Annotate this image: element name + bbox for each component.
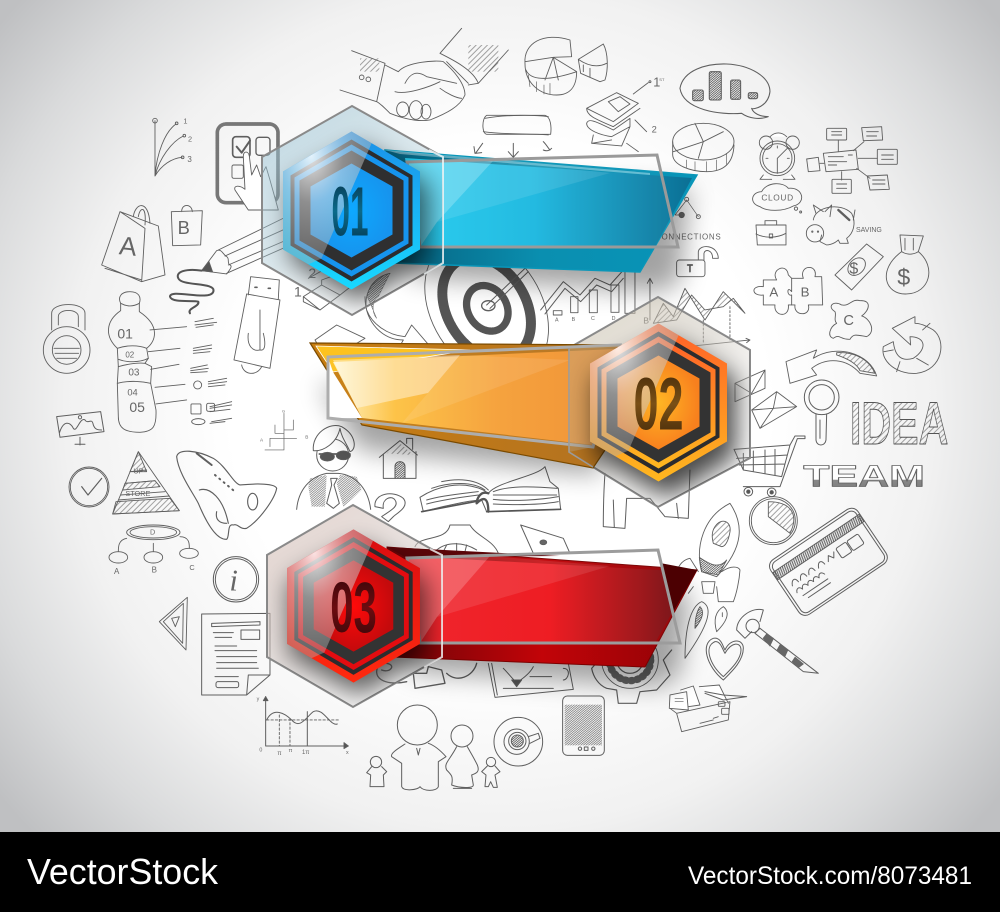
icon: store pyramid: UP — [133, 466, 144, 475]
banner face — [333, 349, 615, 445]
glass frame — [328, 345, 620, 447]
hex shadow — [289, 544, 426, 696]
hexagon badge 02 — [590, 324, 727, 482]
icon: numbered bottle chart — [108, 292, 232, 432]
glass hex edge over banner — [569, 348, 593, 467]
doodles: right column — [655, 123, 941, 383]
doodles: centre band — [294, 214, 750, 402]
icon: gear right — [592, 632, 672, 703]
hexagon badge 01 — [283, 132, 420, 290]
icon: briefcase — [756, 221, 786, 245]
icon: org diagram: B — [152, 566, 157, 575]
footer bar — [0, 832, 1000, 912]
icon: mountain axis chart: B — [643, 315, 649, 325]
icon: small tree diagram: A — [260, 438, 264, 443]
panel 03: red banner — [267, 505, 697, 707]
banner back — [310, 343, 620, 468]
icon: teardrops — [685, 602, 727, 658]
icon: document sheet — [202, 613, 270, 695]
icon: gear partial left — [377, 663, 477, 688]
icon: piggy bank: SAVING — [856, 227, 882, 234]
icon: family figures — [367, 705, 500, 790]
icon: house — [379, 438, 417, 478]
icon: small tree diagram: B — [305, 434, 308, 439]
icon: store pyramid: STORE — [125, 489, 151, 498]
hexagon badge 03 — [287, 529, 420, 682]
doodles: arrows under the button — [474, 142, 552, 157]
banner face — [405, 556, 695, 643]
icon: info circle — [213, 557, 259, 602]
icon: numbered bottle chart: 02 — [125, 350, 135, 359]
icon: question mark — [375, 494, 405, 522]
icon: numbered bottle chart: 03 — [128, 367, 140, 378]
icon: touch tablet with checkbox — [217, 124, 278, 210]
icon: three small arrows — [474, 142, 552, 157]
icon: check mark circle — [69, 467, 109, 507]
icon: rocket — [677, 503, 740, 602]
icon: recycle arrow — [883, 317, 941, 373]
icon: cube steps: 1 — [294, 284, 302, 300]
icon: puzzle A B: A — [769, 285, 778, 300]
icon: cube steps — [294, 265, 355, 310]
icon: org diagram — [109, 525, 198, 576]
icon: pie chart — [525, 37, 577, 95]
glass hexagon backing — [569, 297, 750, 507]
banner back — [387, 547, 697, 667]
doodles: behind middle panels — [297, 425, 690, 553]
icon: presentation board — [57, 412, 104, 445]
label: IDEA sketched word: IDEA — [850, 390, 948, 457]
icon: mind map — [807, 127, 897, 193]
label: 02: 02 — [634, 362, 683, 446]
banner glass highlights — [407, 556, 610, 643]
icon: note with heart — [488, 663, 573, 697]
icon: pie wedge — [578, 44, 607, 82]
banner face — [405, 158, 692, 247]
icon: curved arrow — [365, 273, 432, 352]
glass hexagon backing — [262, 106, 443, 315]
icon: curved left arrow — [786, 350, 877, 383]
icon: handshake — [340, 28, 508, 121]
icon: dollar banknote: $ — [849, 260, 858, 277]
icon: credit card — [766, 505, 890, 618]
icon: padlock — [43, 305, 90, 373]
icon: small tree diagram — [260, 409, 308, 450]
panel 01: blue banner — [262, 106, 697, 315]
icon: folder with notes and pen — [669, 685, 747, 732]
icon: cloud — [753, 184, 802, 213]
icon: smartphone — [563, 696, 604, 755]
watermark right: VectorStock.com/8073481 — [688, 862, 972, 890]
icon: branching line chart — [153, 116, 192, 176]
icon: info circle: i — [229, 564, 238, 598]
banner glass highlights — [385, 150, 650, 247]
icon: wave graph — [257, 697, 349, 757]
doodles: left column — [43, 116, 308, 450]
icon: wave graph: 1π — [302, 750, 309, 756]
icon: magnifier — [804, 380, 839, 445]
banner shadow — [400, 175, 690, 292]
glass hexagon backing — [267, 505, 442, 707]
icon: branching line chart: 1 — [183, 116, 187, 125]
doodles: bottom centre — [367, 632, 747, 790]
banner back — [385, 150, 697, 272]
icon: mountain axis chart — [643, 278, 750, 347]
label: TEAM sketched word: TEAM — [803, 460, 925, 494]
icon: money bag: $ — [897, 264, 910, 290]
icon: large gear behind panel — [415, 525, 498, 553]
icon: stacked books: 1 — [653, 76, 660, 90]
icon: growth chart: A — [555, 318, 559, 324]
icon: coffee cup — [494, 717, 543, 766]
icon: blank button — [483, 115, 551, 135]
label: connections — [655, 197, 721, 242]
icon: stacked books: 2 — [652, 125, 657, 135]
icon: small tree diagram: G — [282, 409, 285, 414]
icon: tie — [737, 609, 818, 673]
glass hex edge over banner — [424, 150, 443, 274]
glass frame — [407, 155, 678, 247]
icon: puzzle C — [830, 300, 872, 339]
icon: dollar banknote — [835, 244, 883, 290]
icon: org diagram: C — [189, 563, 195, 572]
icon: open book — [420, 467, 561, 512]
icon: puzzle A B — [754, 267, 823, 314]
icon: 3d pie chart — [673, 123, 734, 172]
icon: growth chart — [541, 268, 635, 324]
icon: heart — [706, 638, 743, 680]
icon: triangle ruler — [159, 597, 187, 650]
white corner — [329, 360, 362, 418]
icon: shopping cart — [734, 436, 805, 497]
icon: shopping bag B — [171, 205, 202, 246]
glass frame — [407, 550, 680, 643]
icon: growth chart: B — [572, 317, 576, 323]
icon: pencil with scribble — [170, 217, 287, 313]
icon: wave graph: y — [257, 697, 260, 703]
icon: open lock — [677, 247, 718, 277]
icon: diamond sheet — [315, 325, 365, 348]
icon: store pyramid — [113, 452, 179, 514]
icon: stacked books — [587, 76, 665, 152]
icon: numbered bottle chart: 05 — [129, 399, 145, 415]
icon: branching line chart: 3 — [187, 155, 192, 164]
label: connections: CONNECTIONS — [655, 233, 721, 242]
banner glass highlights — [333, 355, 570, 423]
icon: numbered bottle chart: 04 — [127, 387, 138, 397]
icon: growth chart: C — [591, 316, 595, 322]
icon: wave graph: π — [277, 751, 281, 757]
icon: target with arrow — [399, 214, 574, 402]
doodles: lower right — [677, 370, 948, 680]
icon: speech bubble bars — [680, 64, 770, 118]
icon: branching line chart: 2 — [188, 134, 192, 143]
icon: puzzle C: C — [843, 313, 854, 329]
hex shadow — [596, 340, 736, 498]
icon: wave graph: 0 — [259, 748, 262, 754]
icon: growth chart: D — [612, 316, 616, 322]
watermark left: VectorStock — [27, 851, 219, 892]
icon: rocket plane — [177, 451, 277, 539]
doodle layer: hand-drawn business sketches — [43, 28, 948, 790]
icon: small pie — [749, 497, 797, 545]
icon: money bag — [886, 235, 929, 294]
icon: cube steps: 2 — [308, 265, 316, 281]
icon: envelopes — [735, 370, 797, 428]
icon: piggy bank — [806, 205, 882, 245]
icon: org diagram: D — [150, 528, 155, 537]
doodles: lower left — [69, 451, 349, 757]
icon: cloud: CLOUD — [761, 193, 794, 203]
icon: numbered bottle chart: 01 — [117, 326, 133, 342]
icon: puzzle A B: B — [801, 285, 810, 300]
icon: shopping bag A — [102, 206, 165, 282]
panel 02: orange banner — [310, 297, 750, 507]
label: 03: 03 — [330, 568, 377, 648]
icon: stacked books: ST — [659, 77, 665, 82]
banner shadow — [400, 575, 690, 687]
icon: shopping bag B: B — [178, 217, 190, 238]
hex shadow — [291, 146, 428, 303]
icon: wave graph: π — [289, 748, 293, 754]
doodles: top centre — [340, 28, 770, 152]
hexagon badge 01: 01 — [332, 172, 368, 250]
banner shadow — [320, 385, 600, 475]
icon: shopping bag A: A — [118, 230, 139, 262]
icon: standing figure — [603, 470, 690, 528]
icon: wave graph: x — [346, 750, 349, 756]
icon: usb stick — [234, 277, 280, 373]
glass hex edge over banner — [424, 549, 442, 667]
icon: org diagram: A — [114, 567, 120, 576]
icon: alarm clock — [759, 133, 799, 179]
icon: laptop — [521, 525, 570, 553]
icon: businessman with sunglasses — [297, 425, 371, 509]
